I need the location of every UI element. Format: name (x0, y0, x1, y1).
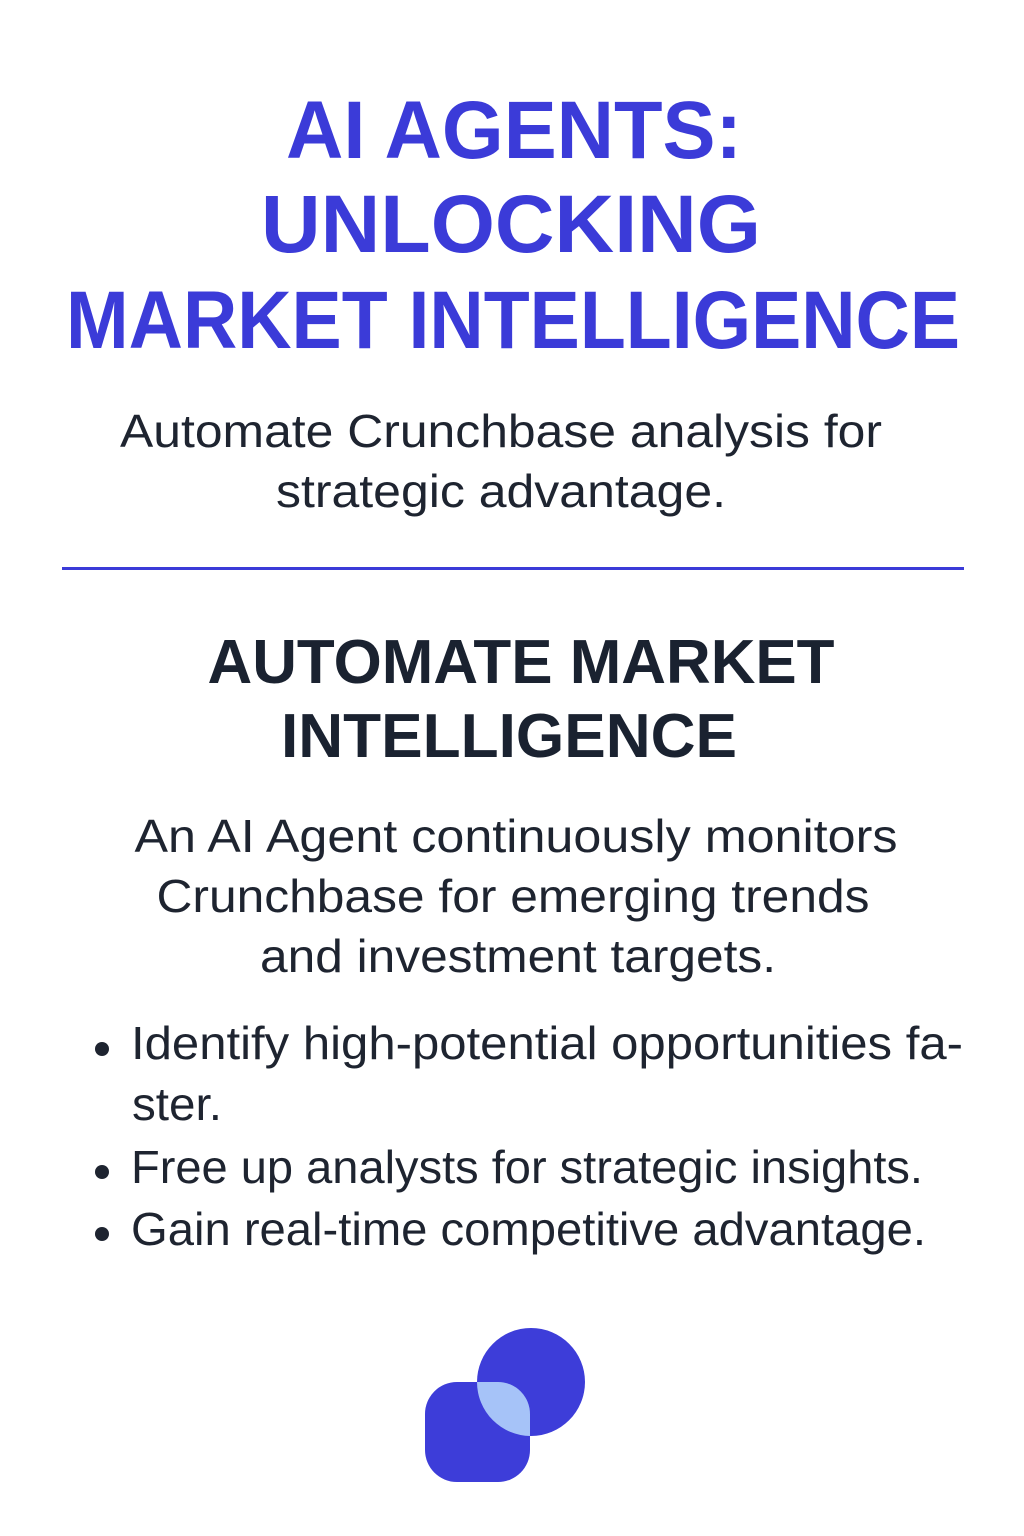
bullet list: Free up analysts for strategic insights. (131, 1141, 923, 1193)
paragraph: and investment targets. (260, 930, 776, 982)
title: UNLOCKING (261, 179, 761, 270)
icon: logo overlapping shapes (425, 1328, 585, 1482)
title: MARKET INTELLIGENCE (66, 275, 960, 366)
paragraph (134, 810, 898, 982)
bullet list: ster. (132, 1078, 222, 1130)
title: AI AGENTS: (286, 85, 742, 176)
bullet list: Gain real-time competitive advantage. (131, 1203, 926, 1255)
bullet list: Identify high-potential opportunities fa- (131, 1017, 963, 1069)
paragraph: Crunchbase for emerging trends (156, 870, 870, 922)
section heading: INTELLIGENCE (281, 702, 737, 771)
subtitle (120, 405, 882, 517)
bullet list (95, 1017, 963, 1255)
paragraph: An AI Agent continuously monitors (134, 810, 898, 862)
section heading (208, 628, 835, 771)
section heading: AUTOMATE MARKET (208, 628, 835, 697)
subtitle: strategic advantage. (276, 465, 726, 517)
subtitle: Automate Crunchbase analysis for (120, 405, 882, 457)
title (66, 85, 960, 366)
